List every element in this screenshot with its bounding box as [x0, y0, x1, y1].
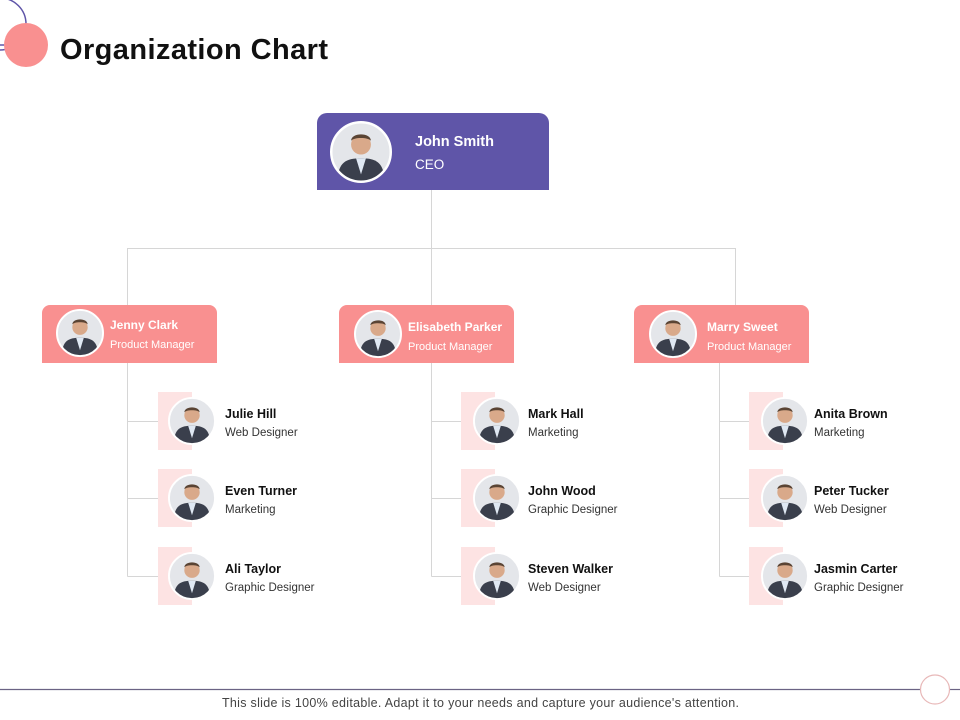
manager: Elisabeth Parker: Elisabeth Parker [408, 320, 502, 334]
member: Mark Hall: Mark Hall [528, 407, 584, 421]
footer text: This slide is 100% editable. Adapt it to your needs and capture your audience's attention. [222, 696, 739, 710]
member: Jasmin Carter: Jasmin Carter [814, 562, 898, 576]
member: Jasmin Carter [749, 547, 904, 605]
manager: Jenny Clark [42, 305, 217, 363]
member: Even Turner: Even Turner [225, 484, 297, 498]
member: Julie Hill [158, 392, 298, 450]
member: Peter Tucker: Web Designer [814, 504, 887, 516]
member: Julie Hill: Web Designer [225, 427, 298, 439]
member: Jasmin Carter: Graphic Designer [814, 582, 904, 594]
member: Anita Brown [749, 392, 888, 450]
decorative header circles [0, 0, 48, 67]
manager: Marry Sweet [634, 305, 809, 363]
member: Even Turner: Marketing [225, 504, 276, 516]
manager: Jenny Clark: Jenny Clark [110, 318, 178, 332]
member: John Wood [461, 469, 618, 527]
connector lines [128, 190, 749, 576]
manager: Marry Sweet: Product Manager [707, 341, 792, 353]
member: Steven Walker: Steven Walker [528, 562, 613, 576]
member: John Wood: John Wood [528, 484, 596, 498]
CEO card [317, 113, 549, 190]
CEO card: CEO [415, 157, 444, 172]
member: Ali Taylor: Ali Taylor [225, 562, 281, 576]
member: John Wood: Graphic Designer [528, 504, 618, 516]
footer line and circle [0, 675, 960, 704]
member: Peter Tucker: Peter Tucker [814, 484, 889, 498]
manager: Elisabeth Parker [339, 305, 514, 363]
CEO card: John Smith [415, 134, 494, 150]
member: Steven Walker [461, 547, 613, 605]
member: Peter Tucker [749, 469, 889, 527]
member: Mark Hall: Marketing [528, 427, 578, 439]
member: Ali Taylor [158, 547, 315, 605]
member: Julie Hill: Julie Hill [225, 407, 276, 421]
member: Even Turner [158, 469, 297, 527]
member: Anita Brown: Anita Brown [814, 407, 888, 421]
member: Ali Taylor: Graphic Designer [225, 582, 315, 594]
member: Mark Hall [461, 392, 584, 450]
manager: Marry Sweet: Marry Sweet [707, 320, 778, 334]
title: Organization Chart [60, 34, 328, 66]
manager: Jenny Clark: Product Manager [110, 339, 195, 351]
member: Anita Brown: Marketing [814, 427, 864, 439]
member: Steven Walker: Web Designer [528, 582, 601, 594]
manager: Elisabeth Parker: Product Manager [408, 341, 493, 353]
